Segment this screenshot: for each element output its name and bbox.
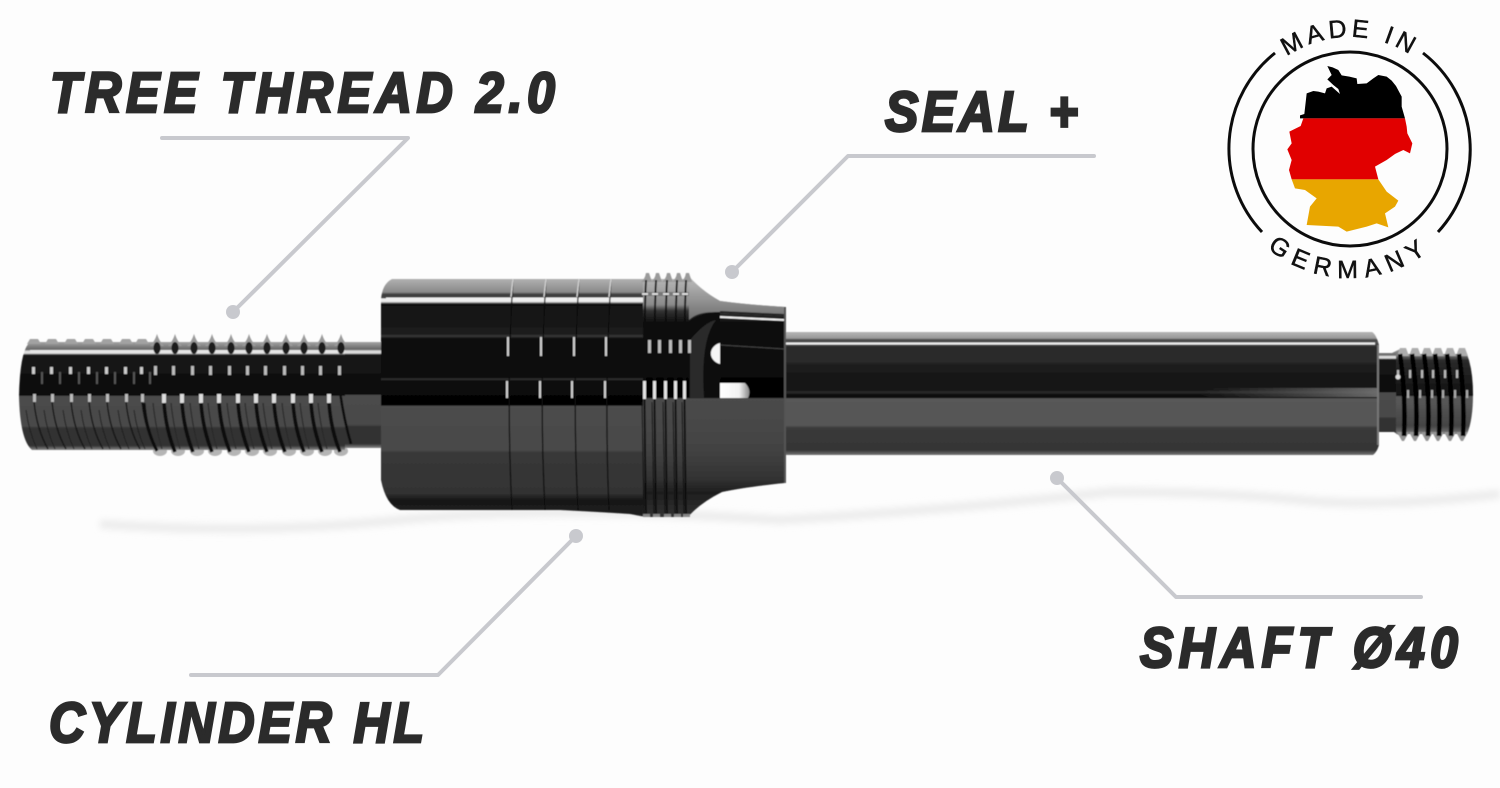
badge text top: MADE IN — [1280, 19, 1416, 56]
floor shadow — [100, 492, 1500, 529]
badge rings — [1229, 52, 1470, 246]
product: threaded bolt — [19, 273, 1473, 517]
main cylinder — [381, 279, 646, 517]
heading: seal: SEAL + — [885, 80, 1078, 144]
badge text bottom: GERMANY — [1270, 238, 1421, 278]
leader line: cylinder — [191, 529, 583, 675]
leader line: seal — [725, 156, 1094, 279]
right thread — [1379, 348, 1473, 441]
shaft — [785, 332, 1379, 455]
badge: made in germany — [1227, 19, 1472, 278]
cone section — [686, 273, 786, 517]
heading: shaft: SHAFT Ø40 — [1140, 616, 1458, 680]
neck — [345, 342, 381, 448]
left thread body — [19, 334, 348, 456]
ring grooves — [641, 273, 692, 517]
leader line: shaft — [1050, 471, 1421, 597]
icon: germany map flag — [1287, 66, 1412, 232]
heading: tree thread: TREE THREAD 2.0 — [50, 61, 555, 125]
leader line: tree thread — [162, 138, 408, 319]
heading: cylinder: CYLINDER HL — [49, 691, 424, 755]
